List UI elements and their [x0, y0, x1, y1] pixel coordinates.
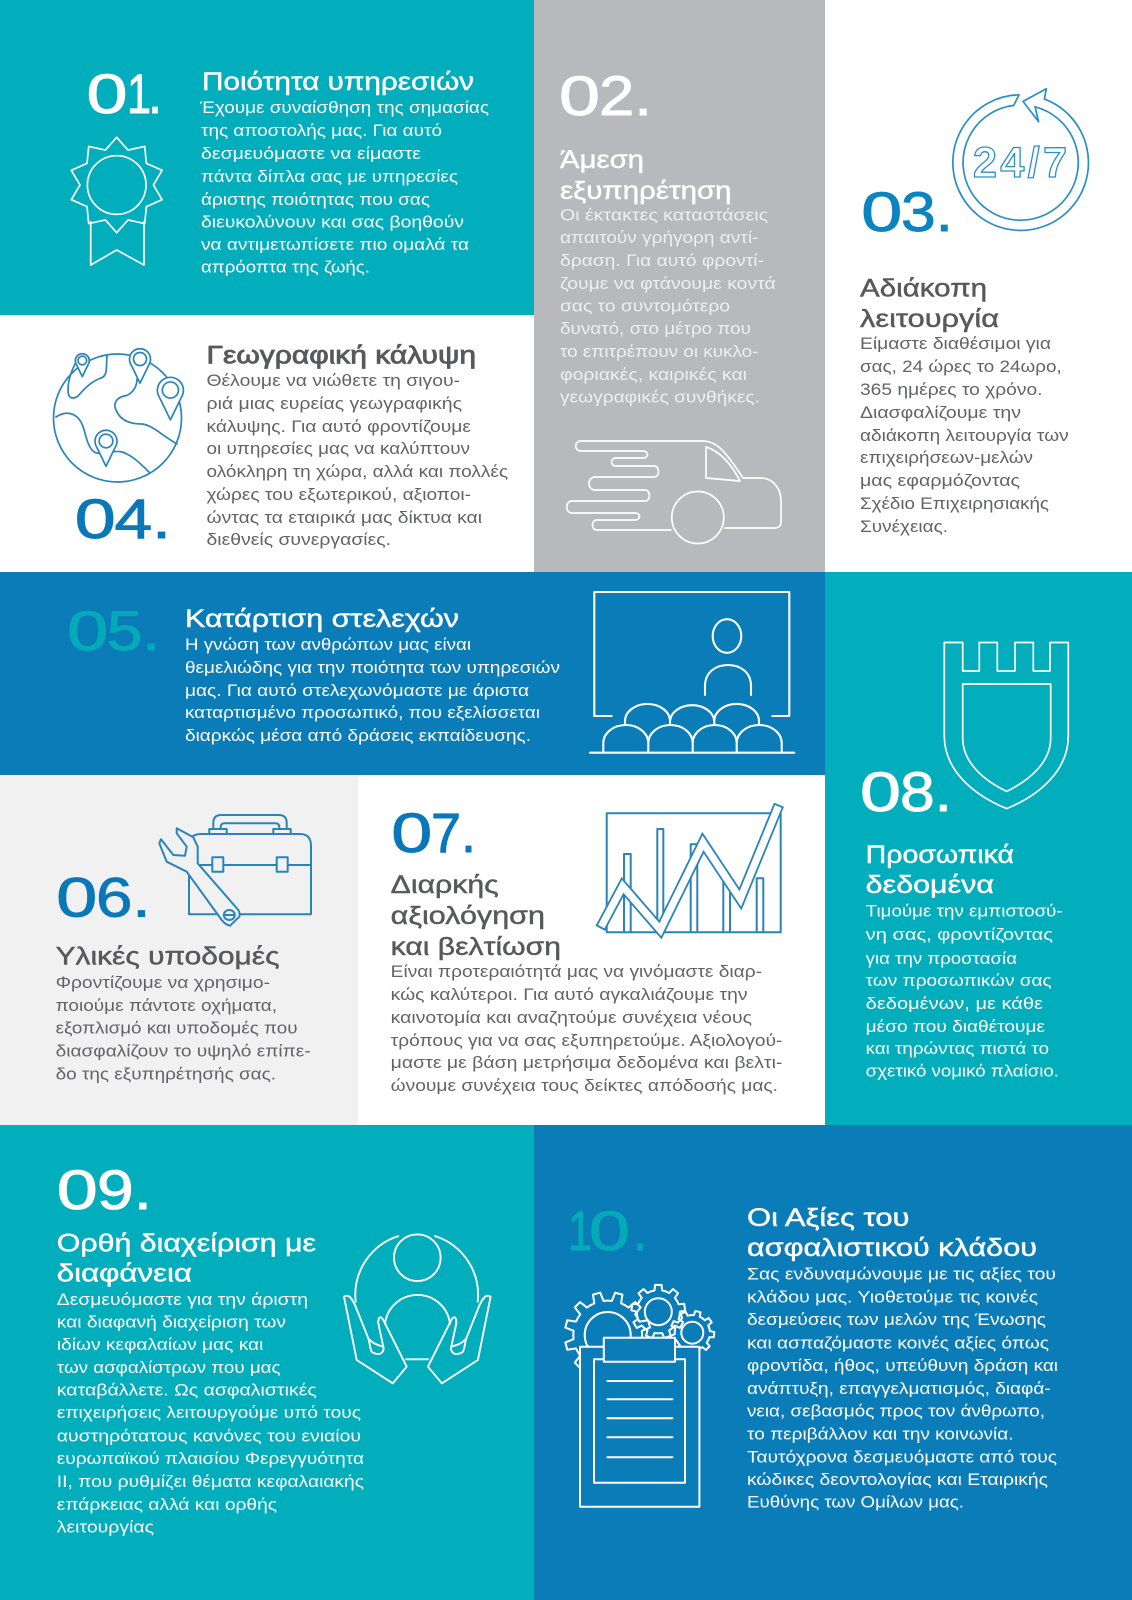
number 02: 2.	[599, 64, 652, 127]
body text 10: Σας ενδυναμώνουμε με τις αξίες του	[747, 1265, 1056, 1283]
icon: globe with pins	[54, 349, 183, 482]
body text 07: καινοτομία και αναζητούμε συνέχεια νέους	[391, 1009, 752, 1027]
heading: proper management: διαφάνεια	[57, 1260, 192, 1288]
body text 08: σχετικό νομικό πλαίσιο.	[866, 1062, 1059, 1080]
heading: continuous evaluation: Διαρκής	[391, 871, 499, 899]
icon: medal	[71, 137, 162, 265]
body text 01: Έχουμε συναίσθηση της σημασίας	[199, 99, 489, 117]
number 03: 0	[861, 180, 902, 243]
body text 09: ευρωπαϊκού πλαισίου Φερεγγυότητα	[57, 1450, 365, 1468]
body text 03: μας εφαρμόζοντας	[860, 472, 1020, 490]
heading: personal data: δεδομένα	[866, 871, 994, 899]
body text 09: λειτουργίας	[57, 1519, 154, 1537]
number 08: 0	[860, 760, 901, 823]
heading: industry values	[747, 1204, 1037, 1262]
body text 07: ώνουμε συνέχεια τους δείκτες απόδοσής μας.	[391, 1077, 778, 1095]
body text 10: Ταυτόχρονα δεσμευόμαστε από τους	[747, 1448, 1057, 1466]
heading: continuous operation: Αδιάκοπη	[860, 275, 987, 303]
body text 07: κώς καλύτεροι. Για αυτό αγκαλιάζουμε την	[391, 986, 748, 1004]
body text 04: Θέλουμε να νιώθετε τη σιγου-	[206, 372, 460, 390]
number 10	[568, 1199, 647, 1262]
body text 09: καταβάλλετε. Ως ασφαλιστικές	[57, 1382, 317, 1400]
icon: speeding van	[567, 441, 781, 544]
body text 09: ιδίων κεφαλαίων μας και	[57, 1336, 264, 1354]
body text 10: φροντίδα, ήθος, υπεύθυνη δράση και	[747, 1357, 1058, 1375]
body text 05: διαρκώς μέσα από δράσεις εκπαίδευσης.	[185, 727, 531, 745]
body text 10: Ευθύνης των Ομίλων μας.	[747, 1494, 964, 1512]
body text 10: ανάπτυξη, επαγγελματισμός, διαφά-	[747, 1380, 1051, 1398]
panel: 04 geographic coverage	[0, 315, 534, 572]
body text 03: 365 ημέρες το χρόνο.	[860, 381, 1042, 399]
number 03: 3.	[901, 180, 953, 243]
body text 08: Τιμούμε την εμπιστοσύ-	[866, 902, 1063, 920]
number 01: .	[148, 62, 162, 125]
body text 08: για την προστασία	[866, 950, 1018, 968]
body text 03: Είμαστε διαθέσιμοι για	[860, 335, 1052, 353]
body text 01: πάντα δίπλα σας με υπηρεσίες	[201, 168, 458, 186]
number 07: 0	[391, 801, 432, 864]
body text 03: Διασφαλίζουμε την	[860, 404, 1021, 422]
body text 03: Σχέδιο Επιχειρησιακής	[860, 495, 1049, 513]
icon: hands holding person	[344, 1234, 491, 1383]
panel: 08 personal data	[825, 572, 1132, 1125]
body text 04: χώρες του εξωτερικού, αξιοποι-	[206, 486, 471, 504]
heading: personal data: Προσωπικά	[866, 841, 1014, 869]
body text 01: απρόοπτα της ζωής.	[201, 258, 370, 276]
panel: 09 proper management	[0, 1125, 534, 1600]
body text 09: αυστηρότατους κανόνες του ενιαίου	[57, 1428, 361, 1446]
number 10: 1	[568, 1199, 592, 1262]
body text 04: κάλυψης. Για αυτό φροντίζουμε	[206, 418, 472, 436]
body text 02: δραση. Για αυτό φροντί-	[560, 252, 764, 270]
heading: personal data	[866, 841, 1014, 899]
body text 06: εξοπλισμό και υποδομές που	[56, 1020, 297, 1038]
body text 01: άριστης ποιότητας που σας	[201, 191, 430, 209]
body text 02: ζουμε να φτάνουμε κοντά	[560, 275, 776, 293]
heading: proper management	[57, 1230, 316, 1288]
number 07: 7.	[431, 801, 476, 864]
number 06	[56, 865, 151, 928]
body text 08: νη σας, φροντίζοντας	[866, 926, 1053, 944]
heading: infrastructure: Υλικές υποδομές	[56, 943, 279, 971]
body text 05: Η γνώση των ανθρώπων μας είναι	[185, 636, 471, 654]
heading: immediate service: Άμεση	[560, 146, 644, 174]
body text 01: δεσμευόμαστε να είμαστε	[201, 145, 422, 163]
body text 07	[391, 963, 782, 1095]
number 02: 0	[559, 64, 600, 127]
body text 07: τρόπους για να σας εξυπηρετούμε. Αξιολογού-	[391, 1032, 782, 1050]
body text 03: Συνέχειας.	[860, 518, 948, 536]
number 01: 1	[127, 62, 151, 125]
number 09: 0	[57, 1158, 98, 1221]
heading: continuous evaluation: και βελτίωση	[391, 933, 561, 961]
body text 02: σας το συντομότερο	[560, 298, 730, 316]
number 05: 5.	[107, 599, 160, 662]
number 03	[861, 180, 953, 243]
body text 10: το περιβάλλον και την κοινωνία.	[747, 1425, 1014, 1443]
body text 06: δο της εξυπηρέτησής σας.	[56, 1066, 276, 1084]
panel: 01 service quality	[0, 0, 534, 315]
body text 10: νεια, σεβασμός προς τον άνθρωπο,	[747, 1403, 1045, 1421]
body text 06	[56, 974, 311, 1084]
body text 07: Είναι προτεραιότητά μας να γινόμαστε διαρ-	[391, 963, 762, 981]
number 06: 0	[56, 865, 97, 928]
body text 08: μέσο που διαθέτουμε	[866, 1018, 1046, 1036]
body text 01: διευκολύνουν και σας βοηθούν	[201, 214, 464, 232]
number 09	[57, 1158, 152, 1221]
panel: 07 continuous evaluation	[358, 775, 825, 1125]
number 08: 8.	[900, 760, 952, 823]
icon: 24/7 clock	[953, 89, 1088, 230]
body text 06: Φροντίζουμε να χρησιμο-	[56, 974, 270, 992]
heading: proper management: Ορθή διαχείριση με	[57, 1230, 316, 1258]
panel: 10 industry values	[534, 1125, 1132, 1600]
number 07	[391, 801, 476, 864]
body text 03: επιχειρήσεων-μελών	[860, 449, 1033, 467]
panel: 03 continuous operation	[825, 0, 1132, 572]
number 01	[86, 62, 162, 125]
heading: continuous evaluation: αξιολόγηση	[391, 902, 545, 930]
body text 02	[560, 206, 776, 407]
body text 10: δεσμεύσεις των μελών της Ένωσης	[747, 1311, 1046, 1329]
body text 03	[860, 335, 1069, 536]
number 04: 4.	[114, 487, 171, 550]
number 09: 9.	[97, 1158, 152, 1221]
heading: immediate service: εξυπηρέτηση	[560, 177, 732, 205]
body text 09: και διαφανή διαχείριση των	[57, 1314, 286, 1332]
body text 01: της αποστολής μας. Για αυτό	[201, 122, 442, 140]
icon: castle shield	[944, 642, 1068, 809]
body text 10: κλάδου μας. Υιοθετούμε τις κοινές	[747, 1288, 1038, 1306]
heading: continuous operation	[860, 275, 999, 333]
body text 02: γεωγραφικές συνθήκες.	[560, 389, 760, 407]
heading: industry values: Οι Αξίες του	[747, 1204, 910, 1232]
body text 08	[866, 902, 1063, 1080]
panel: 06 infrastructure	[0, 775, 358, 1125]
heading: service quality: Ποιότητα υπηρεσιών	[202, 68, 474, 96]
body text 03: αδιάκοπη λειτουργία των	[860, 427, 1069, 445]
number 04: 0	[75, 487, 116, 550]
body text 09: επάρκειας αλλά και ορθής	[57, 1496, 277, 1514]
body text 10: κώδικες δεοντολογίας και Εταιρικής	[747, 1471, 1048, 1489]
body text 08: δεδομένων, με κάθε	[866, 995, 1044, 1013]
number 10: .	[633, 1199, 647, 1262]
heading: continuous evaluation	[391, 871, 561, 961]
body text 06: ποιούμε πάντοτε οχήματα,	[56, 997, 277, 1015]
panel: 02 immediate service	[534, 0, 825, 572]
body text 02: δυνατό, στο μέτρο που	[560, 320, 751, 338]
number 04	[75, 487, 171, 550]
icon: gears and clipboard	[555, 1283, 720, 1507]
body text 06: διασφαλίζουν το υψηλό επίπε-	[56, 1042, 311, 1060]
heading: continuous operation: λειτουργία	[860, 305, 999, 333]
body text 02: το επιτρέπουν οι κυκλο-	[560, 343, 758, 361]
body text 01	[199, 99, 489, 276]
body text 04: διεθνείς συνεργασίες.	[206, 531, 391, 549]
panel: 05 staff training	[0, 572, 825, 775]
body text 05: καταρτισμένο προσωπικό, που εξελίσσεται	[185, 704, 540, 722]
body text 03: σας, 24 ώρες το 24ωρο,	[860, 358, 1062, 376]
body text 02: φοριακές, καιρικές και	[560, 366, 747, 384]
heading: geographic coverage: Γεωγραφική κάλυψη	[206, 342, 476, 370]
body text 10	[747, 1265, 1058, 1512]
body text 04: ριά μιας ευρείας γεωγραφικής	[206, 395, 462, 413]
body text 05	[185, 636, 560, 745]
body text 08: και τηρώντας πιστά το	[866, 1040, 1049, 1058]
number 10: 0	[589, 1199, 630, 1262]
body text 09: Δεσμευόμαστε για την άριστη	[57, 1291, 308, 1309]
body text 09: των ασφαλίστρων που μας	[57, 1359, 281, 1377]
body text 08: των προσωπικών σας	[866, 972, 1052, 990]
body text 05: μας. Για αυτό στελεχωνόμαστε με άριστα	[185, 682, 530, 700]
number 02	[559, 64, 652, 127]
number 06: 6.	[96, 865, 151, 928]
icon: 24/7 clock: 24/7	[973, 139, 1067, 187]
number 01: 0	[86, 62, 128, 125]
heading: immediate service	[560, 146, 732, 205]
body text 02: Οι έκτακτες καταστάσεις	[560, 206, 768, 224]
body text 10: και ασπαζόμαστε κοινές αξίες όπως	[747, 1334, 1049, 1352]
number 05	[67, 599, 160, 662]
number 05: 0	[67, 599, 108, 662]
body text 05: θεμελιώδης για την ποιότητα των υπηρεσιών	[185, 659, 560, 677]
heading: industry values: ασφαλιστικού κλάδου	[747, 1234, 1037, 1262]
body text 09: επιχειρήσεις λειτουργούμε υπό τους	[57, 1404, 361, 1422]
body text 09: II, που ρυθμίζει θέματα κεφαλαιακής	[57, 1473, 364, 1491]
body text 04	[206, 372, 508, 549]
heading: staff training: Κατάρτιση στελεχών	[185, 605, 459, 633]
icon: growth chart	[600, 805, 781, 932]
body text 02: απαιτούν γρήγορη αντί-	[560, 229, 758, 247]
icon: classroom	[590, 592, 794, 753]
body text 04: οι υπηρεσίες μας να καλύπτουν	[206, 440, 470, 458]
icon: toolbox and wrench	[159, 815, 311, 926]
body text 07: μαστε με βάση μετρήσιμα δεδομένα και βελτι-	[391, 1054, 782, 1072]
body text 04: ώντας τα εταιρικά μας δίκτυα και	[206, 509, 482, 527]
number 08	[860, 760, 952, 823]
body text 09	[57, 1291, 365, 1537]
body text 01: να αντιμετωπίσετε πιο ομαλά τα	[201, 236, 470, 254]
body text 04: ολόκληρη τη χώρα, αλλά και πολλές	[206, 463, 508, 481]
